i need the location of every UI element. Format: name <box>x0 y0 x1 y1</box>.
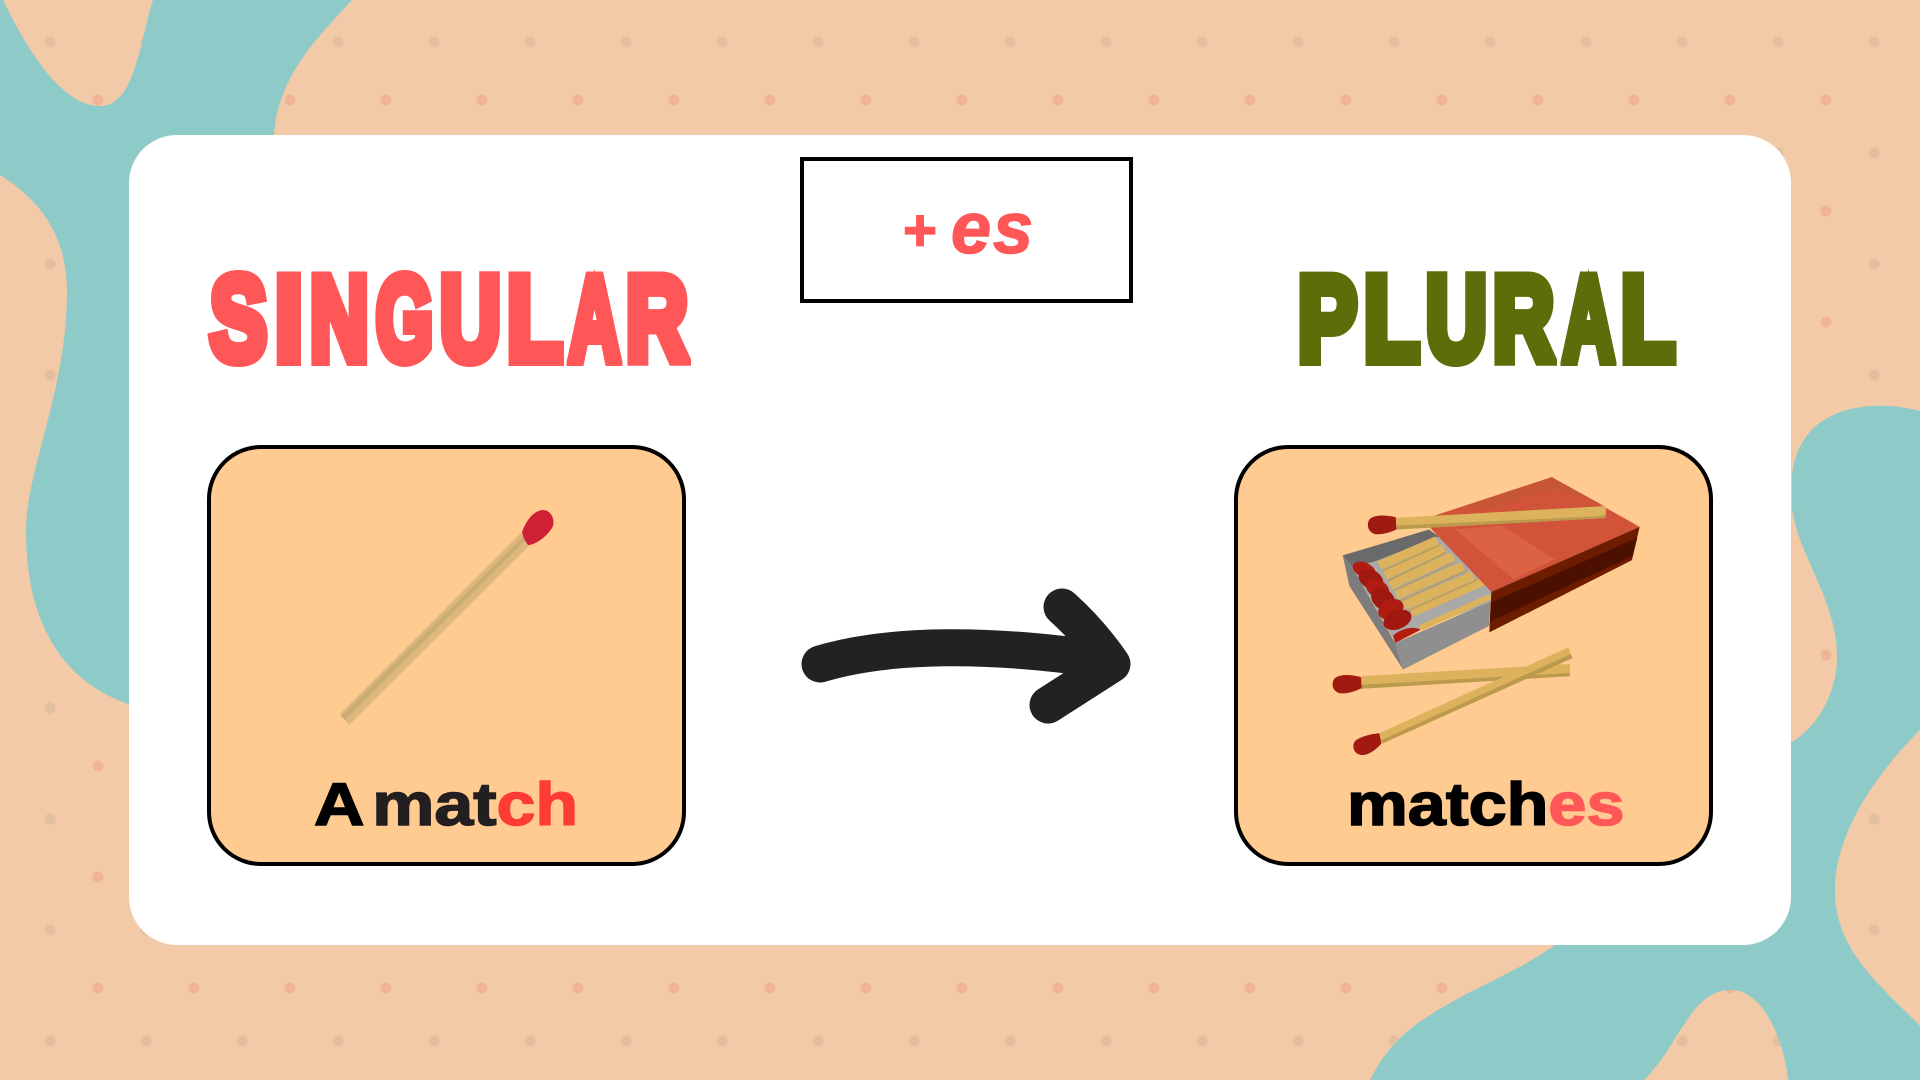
label: a match: ch <box>497 771 578 838</box>
heading: plural <box>1280 250 1720 380</box>
rule box: + es: + <box>902 198 936 263</box>
arrow <box>820 607 1112 705</box>
icon: single match <box>340 510 554 725</box>
label: matches: matches <box>1347 771 1625 838</box>
label: a match: mat <box>372 771 497 838</box>
heading: singular <box>190 250 730 380</box>
main white card <box>129 135 1791 945</box>
panel: plural <box>1236 447 1711 864</box>
teal blob: right <box>1370 406 1920 1080</box>
rule box: + es <box>802 159 1131 301</box>
icon: matchbox with matches <box>1333 477 1640 755</box>
rule box: + es: es <box>951 189 1033 269</box>
label: a match: A <box>314 771 364 838</box>
panel: singular <box>209 447 684 864</box>
teal blob: left <box>0 0 352 720</box>
